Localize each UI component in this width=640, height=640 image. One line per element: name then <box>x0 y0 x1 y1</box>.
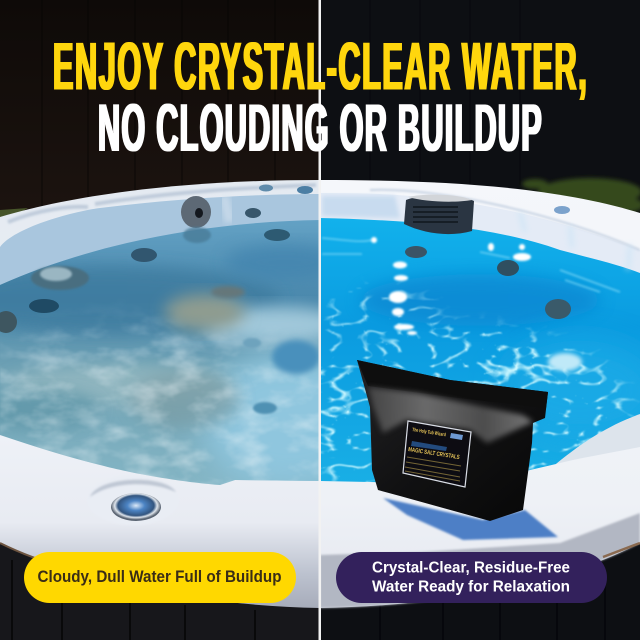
inner wall <box>320 193 640 280</box>
rim lower shading <box>320 513 640 608</box>
wall glints <box>520 212 630 270</box>
badge: clear water: Water Ready for Relaxation <box>372 578 570 596</box>
skimmer vent <box>404 195 474 234</box>
grey cloudy patch <box>130 372 240 428</box>
photo: cloudy hot tub, left half <box>0 0 318 640</box>
badge: cloudy water: Cloudy, Dull Water Full of Buildup <box>38 568 282 586</box>
rim brown edge <box>0 542 35 558</box>
bottom rim jet <box>90 474 176 521</box>
water <box>321 218 640 482</box>
foam texture <box>0 316 318 484</box>
curved rim lip <box>556 414 640 464</box>
wooden fence background <box>0 0 320 640</box>
title line: white: NO CLOUDING OR BUILDUP <box>98 90 542 166</box>
caustic light pattern <box>321 282 640 482</box>
dark fence background <box>370 0 606 640</box>
photo: crystal-clear hot tub, right half <box>320 0 640 640</box>
badge: clear water <box>336 552 607 603</box>
bag sheen <box>368 387 533 443</box>
title line: yellow: ENJOY CRYSTAL-CLEAR WATER, <box>53 29 587 105</box>
wall blue shade <box>322 196 400 218</box>
bag label: MAGIC SALT CRYSTALS <box>408 447 460 461</box>
brown buildup patch <box>165 294 245 330</box>
rim brown edge <box>603 543 640 557</box>
tub rim <box>0 180 320 608</box>
pale cloudy pool <box>194 344 318 481</box>
badge: cloudy water <box>24 552 296 603</box>
green shrubs <box>522 178 640 213</box>
bag label: The Holy Tub Wizard <box>412 427 446 438</box>
cloudy water <box>0 220 318 485</box>
grass at fence base <box>0 208 28 217</box>
rim channel shadow <box>8 185 316 222</box>
darker mid band <box>0 266 280 334</box>
water jets <box>0 184 313 333</box>
inner tub wall <box>0 194 320 287</box>
pillow headrest <box>181 196 211 243</box>
product bag <box>357 360 548 521</box>
wall pale glint <box>224 196 230 222</box>
sun sparkle column <box>371 237 531 335</box>
jet swirl <box>272 340 320 374</box>
title <box>53 29 587 166</box>
badge: clear water: Crystal-Clear, Residue-Free <box>372 560 570 576</box>
center divider line <box>318 0 321 640</box>
bag shadow <box>383 498 558 540</box>
water jets <box>405 206 571 319</box>
bag label <box>403 421 471 487</box>
surface ripples <box>322 238 620 292</box>
water spray <box>548 353 582 371</box>
rim groove <box>370 190 640 250</box>
tub rim <box>320 180 640 608</box>
